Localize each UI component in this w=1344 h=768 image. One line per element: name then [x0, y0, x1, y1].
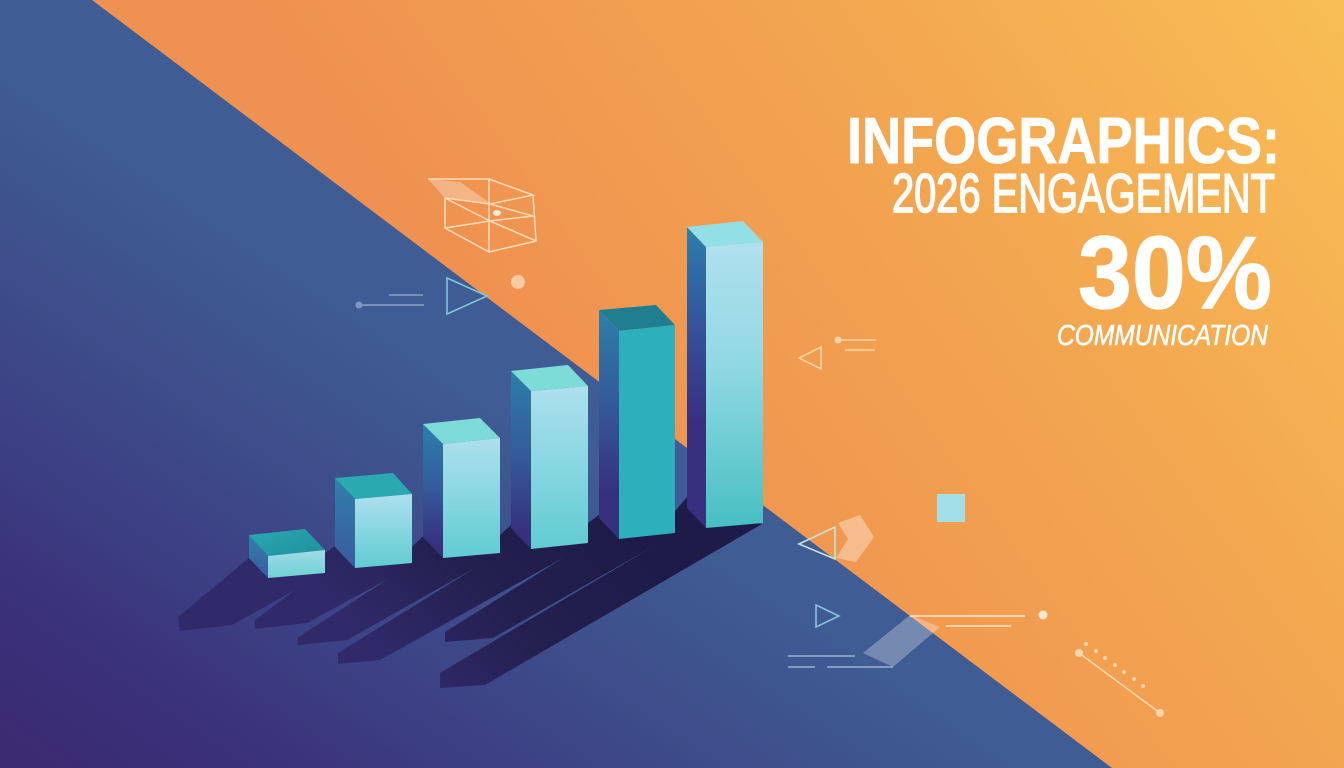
title text block — [847, 104, 1280, 352]
3D bar chart — [178, 221, 763, 688]
icon: teal square — [937, 494, 965, 522]
icon: triangle and lines right — [799, 336, 876, 369]
stat label: communication: COMMUNICATION — [1057, 320, 1268, 352]
bar 3 — [423, 418, 500, 558]
icon: outlined triangle lower — [816, 605, 839, 627]
icon: wireframe box — [428, 179, 536, 252]
bar shadows — [178, 497, 762, 688]
dot — [511, 275, 525, 289]
icon: outlined triangle upper left — [447, 278, 487, 314]
icon: outlined triangle middle — [799, 527, 835, 559]
speed lines upper left — [356, 295, 424, 308]
bar 4 — [511, 365, 588, 549]
bar 2 — [335, 473, 412, 568]
speed lines lower — [788, 610, 1048, 667]
bar 6 — [687, 221, 763, 528]
icon: translucent arrow pentagon — [836, 515, 874, 562]
translucent parallelogram — [863, 615, 940, 667]
bar 5 — [599, 305, 675, 539]
dotted line ornament — [1075, 642, 1164, 717]
stat: 30%: 30% — [1078, 215, 1272, 330]
bar 1 — [249, 529, 325, 578]
